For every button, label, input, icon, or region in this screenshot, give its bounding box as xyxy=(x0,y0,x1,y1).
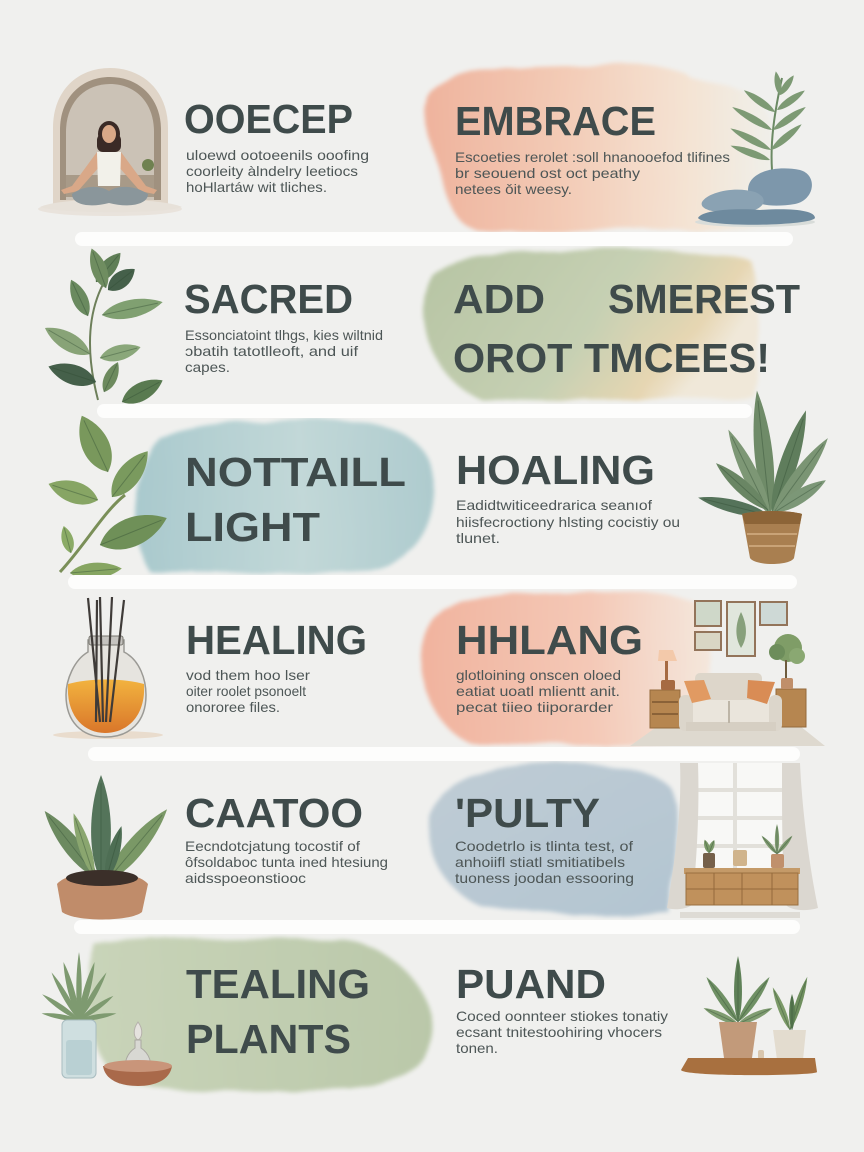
row 5 right: body text xyxy=(455,838,634,886)
row 6 right: body text: Coced oonnteer stiokes tonatiy xyxy=(456,1008,668,1024)
row 1 right: body text: netees ǒit weesy. xyxy=(455,181,572,197)
row 1 right: peach watercolor panel xyxy=(425,64,772,232)
row 6 left: heading xyxy=(186,961,370,1062)
row 3 right: body text: hiisfecroctiony hlsting cocistiy ou xyxy=(456,514,680,530)
row 5 left: body text xyxy=(185,838,388,886)
row 4 right: peach watercolor panel xyxy=(421,592,708,745)
row 5 left: body text: ôfsoldaboc tunta ined htesiung xyxy=(185,854,388,870)
row 4 left: body text: vod them hoo lser xyxy=(186,667,310,683)
row 3 right: body text xyxy=(456,497,680,546)
row 3 left: heading xyxy=(185,449,406,550)
row 6 left: sage watercolor panel xyxy=(88,938,433,1091)
row 4 left: body text: oiter roolet psonoelt xyxy=(186,683,306,699)
divider bars xyxy=(68,232,800,934)
row 6 left: vase and diffuser icon xyxy=(41,952,172,1086)
row 3 left: branch icon xyxy=(45,410,172,581)
row 1 left: body text: uloewd ootoeenils ooofing xyxy=(186,147,369,163)
row 2 right: heading line 1 xyxy=(453,276,800,322)
row 1 left: body text: hoHlartáw wit tliches. xyxy=(186,179,327,195)
row 2 left: body text: ɔbatih tatotlleoft, and uif xyxy=(185,343,358,359)
row 2 right: heading line 1: ADD xyxy=(453,276,545,322)
row 2 left: heading: SACRED xyxy=(184,276,353,322)
row 4 right: living room illustration xyxy=(630,601,825,746)
row 6 right: heading: PUAND xyxy=(456,961,606,1007)
row 3 left: heading: LIGHT xyxy=(185,504,320,550)
row 1 left: heading: OOECEP xyxy=(184,96,353,142)
row 6 right: body text: ecsant tnitestoohiring vhocers xyxy=(456,1024,662,1040)
row 4 right: body text: glotloining onscen oloed xyxy=(456,667,621,683)
row 2 left: body text: capes. xyxy=(185,359,230,375)
row 5 right: blue watercolor panel xyxy=(429,765,677,915)
row 4 right: body text: eatiat uoatl mlientt anit. xyxy=(456,683,620,699)
row 1 left: meditation niche icon xyxy=(38,68,182,216)
row 6 right: body text: tonen. xyxy=(456,1040,498,1056)
row 1 left: body text: coorleity àlndelry leetiocs xyxy=(186,163,358,179)
row 4 left: heading: HEALING xyxy=(186,617,367,663)
row 6 left: heading: PLANTS xyxy=(186,1016,351,1062)
row 5 left: potted plant icon xyxy=(38,775,174,920)
row 3 right: potted plant icon xyxy=(697,390,834,564)
row 4 right: body text: pecat tiieo tiiporarder xyxy=(456,699,613,715)
row 5 left: body text: Eecndotcjatung tocostif of xyxy=(185,838,360,854)
row 2 right: heading line 2: OROT TMCEES! xyxy=(453,335,770,381)
row 5 left: body text: aidsspoeonstiooc xyxy=(185,870,306,886)
row 3 right: body text: tlunet. xyxy=(456,530,500,546)
row 5 left: heading: CAATOO xyxy=(185,790,363,836)
row 3 left: teal watercolor panel xyxy=(136,420,434,573)
row 1 right: body text: Escoeties rerolet :soll hnanooefod tlifines xyxy=(455,149,730,165)
row 5 right: window and cabinet illustration xyxy=(667,763,818,918)
row 2 right: heading line 1: SMEREST xyxy=(608,276,800,322)
row 5 right: body text: tuoness joodan essooring xyxy=(455,870,634,886)
row 1 right: body text: br seouend ost oct peathy xyxy=(455,165,640,181)
row 2 left: body text xyxy=(185,327,383,375)
row 6 right: body text xyxy=(456,1008,668,1056)
row 3 left: heading: NOTTAILL xyxy=(185,449,406,495)
row 6 left: heading: TEALING xyxy=(186,961,370,1007)
row 2 right: sage watercolor panel xyxy=(423,250,759,401)
row 4 left: body text xyxy=(186,667,310,715)
row 5 right: body text: anhoiifl stiatl smitiatibels xyxy=(455,854,625,870)
row 1 right: stones and fern icon xyxy=(695,71,815,227)
row 6 right: shelf with plants icon xyxy=(681,956,817,1075)
row 5 right: body text: Coodetrlo is tlinta test, of xyxy=(455,838,633,854)
row 4 left: body text: onororee files. xyxy=(186,699,280,715)
row 1 right: body text xyxy=(455,149,730,197)
row 3 right: body text: Eadidtwiticeedrarica seanıof xyxy=(456,497,652,513)
row 4 left: reed diffuser icon xyxy=(53,597,163,739)
row 5 right: heading: 'PULTY xyxy=(455,790,600,836)
row 1 left: body text xyxy=(186,147,369,195)
row 2 left: branch icon xyxy=(40,246,167,410)
row 2 left: body text: Essonciatoint tlhgs, kies wiltnid xyxy=(185,327,383,343)
row 4 right: body text xyxy=(456,667,621,715)
row 3 right: heading: HOALING xyxy=(456,447,655,493)
row 4 right: heading: HHLANG xyxy=(456,617,643,663)
row 1 right: heading: EMBRACE xyxy=(455,98,656,144)
